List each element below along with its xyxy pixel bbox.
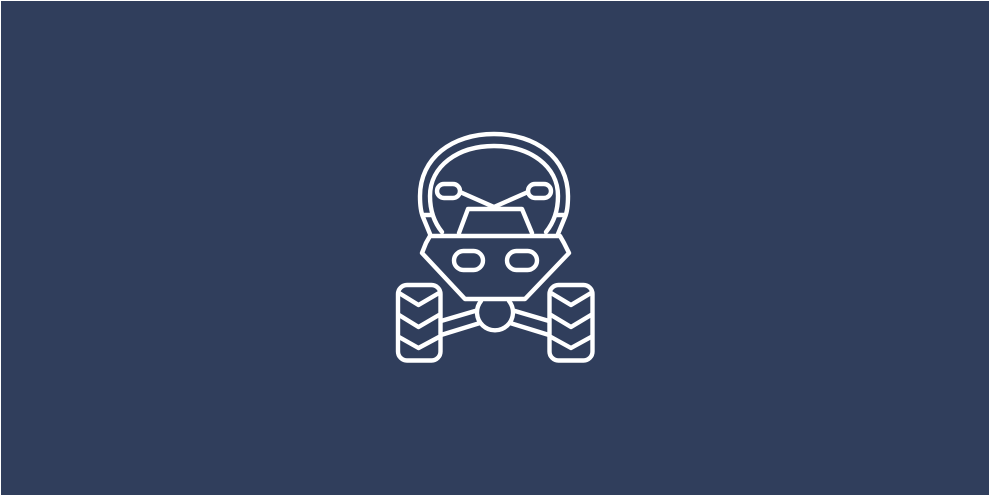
roll cage [420,134,568,234]
left wheel [398,285,440,360]
left suspension arms [441,311,480,335]
body [422,236,569,299]
left mirror [437,184,494,207]
icon: off-road buggy [398,134,592,360]
axle hub [477,301,513,330]
right suspension arms [510,311,549,335]
right mirror [494,184,551,207]
left headlight [454,251,483,270]
right wheel [550,285,592,360]
windshield [459,209,532,233]
right headlight [507,251,537,270]
